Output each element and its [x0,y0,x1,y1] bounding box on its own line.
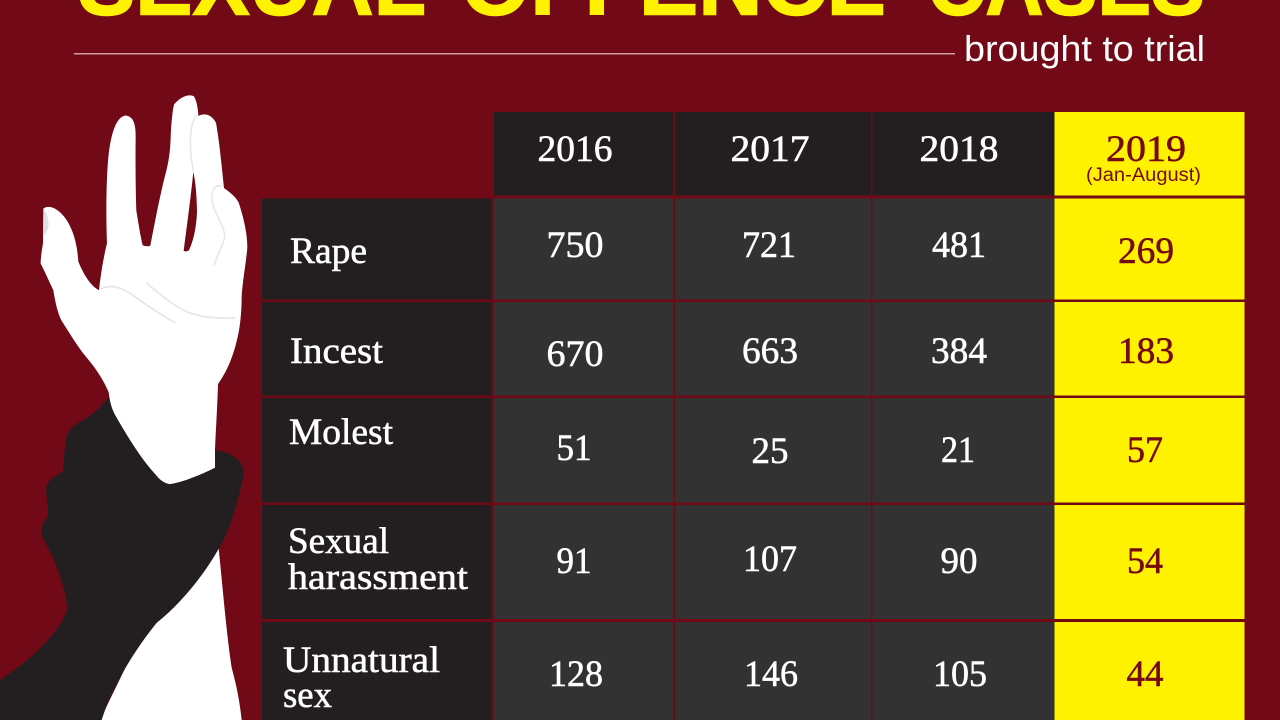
header: 2016 [494,112,673,196]
palm creases [102,116,235,323]
row: Sexual harassment: 91 [556,541,592,582]
header: 2019 [1054,112,1244,196]
row: Sexual harassment: harassment [288,557,469,598]
header: 2017 [676,112,871,196]
row: Unnatural sex: Unnatural [283,640,440,681]
row: Incest [262,302,1244,396]
row: Rape: 481 [932,225,986,266]
row: Unnatural sex: 146 [744,654,798,695]
row: Unnatural sex: 105 [933,654,987,695]
row: Rape: 269 [1118,231,1174,272]
row: Molest: 21 [941,430,975,471]
row: Rape: Rape [290,231,367,272]
row: Unnatural sex [262,622,1244,720]
icon: lower forearm [100,545,242,720]
row: Incest: 670 [546,334,604,375]
row: Sexual harassment: 107 [743,539,797,580]
illustration: raised hand gripped at the wrist [0,95,247,720]
icon: open white hand [41,95,247,484]
title [78,0,1205,34]
row: Rape: 750 [546,225,604,266]
icon: gripping dark hand [0,398,244,720]
row: Rape: 721 [742,225,796,266]
header: 2019: (Jan-August) [1086,165,1201,186]
row: Sexual harassment: 54 [1127,541,1163,582]
row: Sexual harassment [262,505,1244,619]
header: 2018: 2018 [920,129,998,170]
row: Incest: 384 [931,331,987,372]
row: Molest: Molest [289,412,394,453]
row: Sexual harassment: 90 [940,541,978,582]
row: Molest [262,398,1244,502]
table [262,112,1244,720]
header: 2016: 2016 [538,129,612,170]
row: Unnatural sex: 44 [1126,654,1164,695]
row: Incest: Incest [290,331,384,372]
subtitle: brought to trial [964,28,1205,69]
header: 2018 [872,112,1054,196]
header: 2019: 2019 [1106,129,1186,170]
table header row [494,112,1244,196]
row: Unnatural sex: 128 [549,654,603,695]
row: Incest: 183 [1118,331,1174,372]
row: Molest: 57 [1127,430,1163,471]
row: Molest: 25 [752,431,788,472]
row: Sexual harassment: Sexual [288,521,389,562]
row: Incest: 663 [742,331,798,372]
header: 2017: 2017 [730,129,810,170]
row: Molest: 51 [556,428,592,469]
gap between fingers [184,172,197,251]
row: Rape [262,198,1244,300]
row: Unnatural sex: sex [283,675,332,716]
